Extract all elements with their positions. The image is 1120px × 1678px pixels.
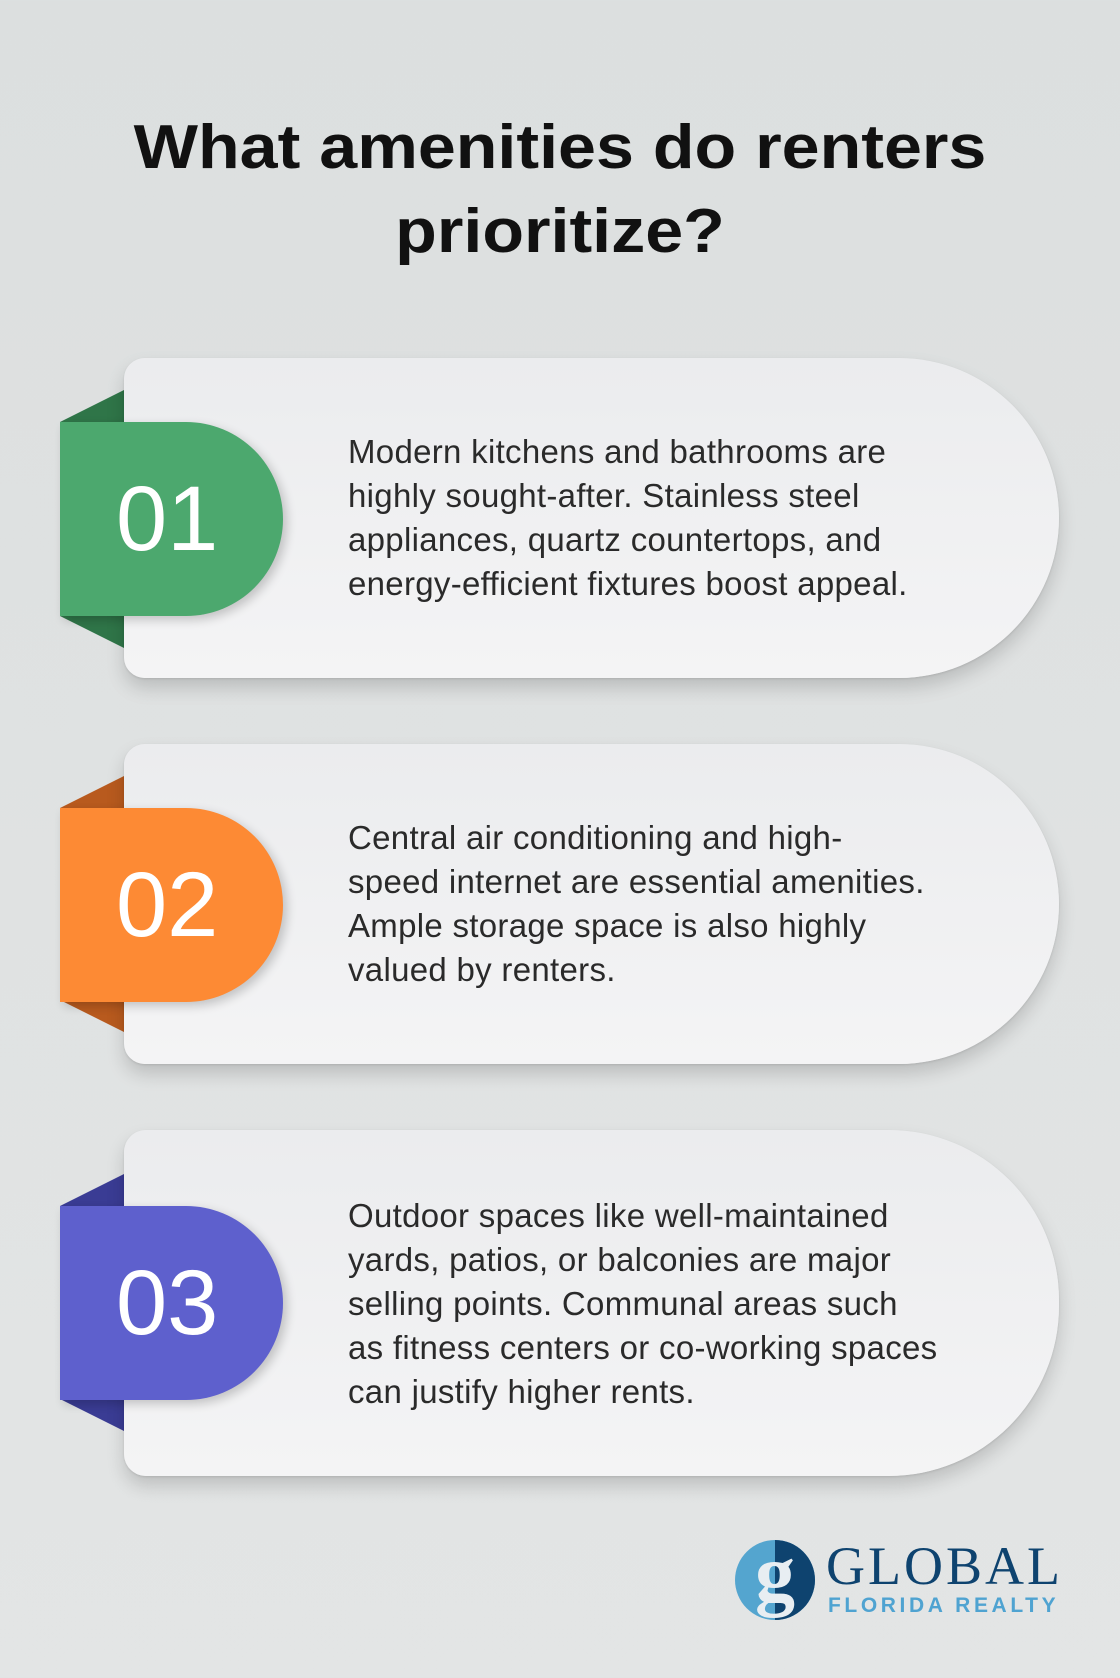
card 1	[124, 358, 1059, 678]
text 2	[348, 819, 925, 988]
logo wordmark: GLOBAL	[826, 1536, 1063, 1596]
text 1: Modern kitchens and bathrooms are	[348, 433, 886, 470]
text 1: highly sought-after. Stainless steel	[348, 477, 860, 514]
badge 02	[60, 808, 283, 1002]
title: What amenities do renters	[134, 113, 986, 182]
title	[134, 113, 986, 266]
text 1	[348, 433, 908, 602]
text 3: Outdoor spaces like well-maintained	[348, 1197, 889, 1234]
card 3	[124, 1130, 1059, 1476]
fold bottom 3	[62, 1400, 124, 1431]
badge 03	[60, 1206, 283, 1400]
text 2: speed internet are essential amenities.	[348, 863, 925, 900]
text 3: selling points. Communal areas such	[348, 1285, 898, 1322]
fold bottom 1	[60, 616, 124, 648]
badge 01: 01	[116, 468, 218, 570]
text 3: yards, patios, or balconies are major	[348, 1241, 891, 1278]
text 1: appliances, quartz countertops, and	[348, 521, 881, 558]
fold top 2	[60, 776, 124, 808]
title: prioritize?	[395, 197, 725, 266]
panel: item 1	[60, 358, 1065, 694]
text 3: as fitness centers or co-working spaces	[348, 1329, 937, 1366]
logo	[735, 1536, 1063, 1620]
badge 03: 03	[116, 1252, 218, 1354]
card 2	[124, 744, 1059, 1064]
text 3	[348, 1197, 937, 1410]
text 3: can justify higher rents.	[348, 1373, 695, 1410]
text 2: valued by renters.	[348, 951, 616, 988]
fold top 1	[60, 390, 124, 422]
logo: FLORIDA REALTY	[828, 1594, 1059, 1617]
text 1: energy-efficient fixtures boost appeal.	[348, 565, 908, 602]
panel: item 2	[60, 744, 1065, 1080]
fold bottom 2	[64, 1002, 124, 1032]
text 2: Ample storage space is also highly	[348, 907, 866, 944]
text 2: Central air conditioning and high-	[348, 819, 843, 856]
icon: g circle	[735, 1538, 815, 1620]
badge 01	[60, 422, 283, 616]
badge 02: 02	[116, 854, 218, 956]
fold top 3	[60, 1174, 124, 1206]
panel: item 3	[60, 1130, 1066, 1493]
